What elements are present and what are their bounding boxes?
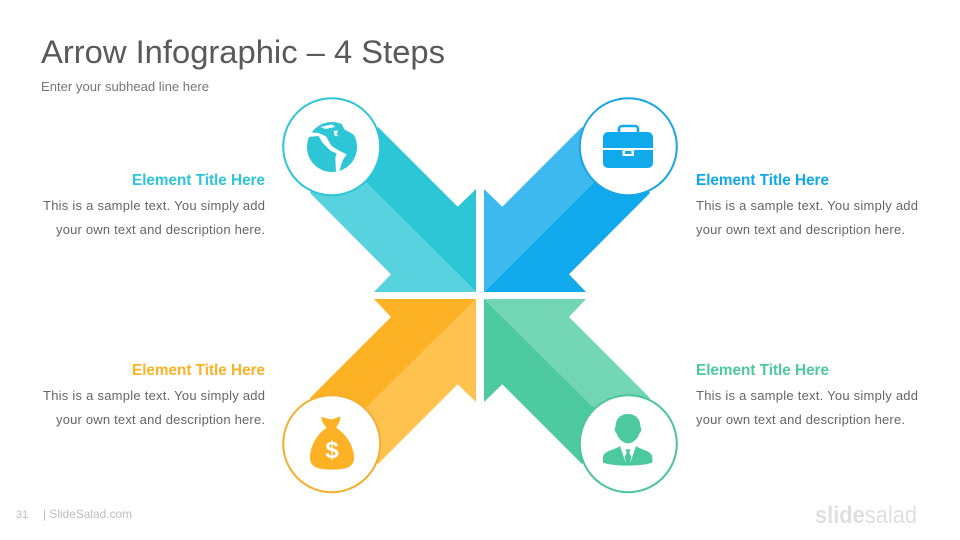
arrow: teal bbox=[310, 127, 476, 292]
text block: green element: Element Title Here bbox=[696, 362, 829, 379]
text block: green element: This is a sample text. You simply add bbox=[696, 388, 918, 403]
arrow: blue bbox=[484, 127, 650, 292]
text block: orange element: Element Title Here bbox=[132, 362, 265, 379]
icon: businessman in circle bbox=[580, 395, 677, 492]
footer: page number and site: 31 bbox=[16, 509, 28, 521]
text block: orange element bbox=[43, 362, 265, 427]
text block: teal element: Element Title Here bbox=[132, 172, 265, 189]
text block: teal element: your own text and description here. bbox=[56, 222, 265, 237]
text block: teal element bbox=[43, 172, 265, 237]
text block: green element: your own text and description here. bbox=[696, 412, 905, 427]
footer: page number and site: | SlideSalad.com bbox=[43, 507, 132, 521]
text block: blue element bbox=[696, 172, 918, 237]
panel: green arrow step bbox=[484, 299, 677, 492]
logo: slidesalad wordmark: slidesalad bbox=[815, 502, 917, 529]
subhead: Enter your subhead line here bbox=[41, 80, 209, 94]
text block: orange element: This is a sample text. You simply add bbox=[43, 388, 265, 403]
text block: green element bbox=[696, 362, 918, 427]
icon: briefcase in circle bbox=[580, 98, 677, 195]
icon: money bag in circle bbox=[283, 395, 380, 492]
panel: blue arrow step bbox=[484, 98, 677, 292]
panel: orange arrow step bbox=[283, 299, 476, 492]
arrow: orange bbox=[310, 299, 476, 464]
text block: blue element: Element Title Here bbox=[696, 172, 829, 189]
icon: globe in circle bbox=[283, 98, 380, 195]
text block: teal element: This is a sample text. You simply add bbox=[43, 198, 265, 213]
icon label: dollar: $ bbox=[325, 437, 339, 464]
text block: orange element: your own text and description here. bbox=[56, 412, 265, 427]
title: Arrow Infographic – 4 Steps bbox=[41, 34, 445, 70]
panel: teal arrow step bbox=[283, 98, 476, 292]
text block: blue element: your own text and description here. bbox=[696, 222, 905, 237]
text block: blue element: This is a sample text. You simply add bbox=[696, 198, 918, 213]
arrow: green bbox=[484, 299, 650, 464]
